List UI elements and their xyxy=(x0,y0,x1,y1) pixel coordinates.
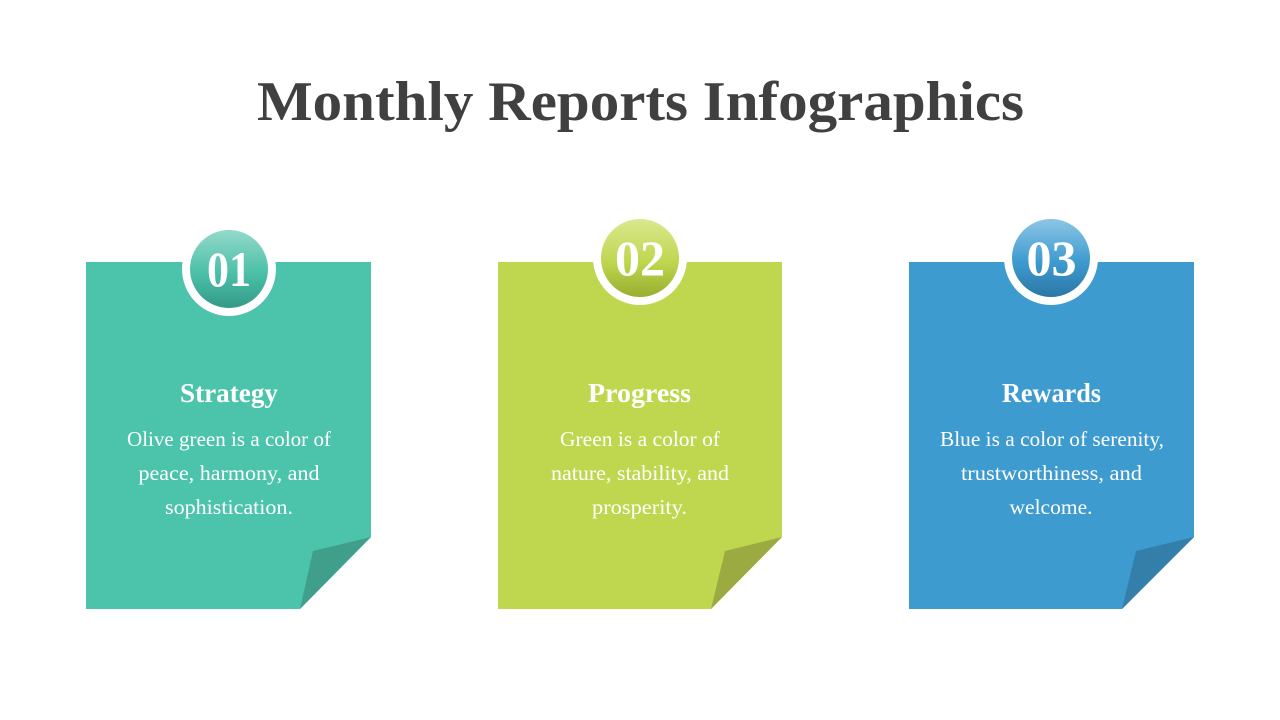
heading: progress: Progress xyxy=(588,378,691,408)
body text: rewards: welcome. xyxy=(1010,495,1092,519)
panel: progress xyxy=(498,211,782,609)
body text: strategy xyxy=(127,427,331,519)
badge: 03: 03 xyxy=(1026,230,1076,286)
folded corner: progress xyxy=(711,537,782,609)
heading: strategy: Strategy xyxy=(180,378,279,408)
badge: 02 xyxy=(593,211,687,305)
badge: 03 xyxy=(1004,211,1098,305)
folded corner: strategy xyxy=(300,537,371,609)
body text: progress: Green is a color of xyxy=(560,427,720,451)
panel: rewards xyxy=(909,211,1194,609)
body text: rewards: Blue is a color of serenity, xyxy=(940,427,1164,451)
panel: strategy xyxy=(86,222,371,609)
card: rewards sheet xyxy=(909,262,1194,609)
badge: 02: 02 xyxy=(615,230,665,286)
card: progress sheet xyxy=(498,262,782,609)
heading: rewards: Rewards xyxy=(1002,378,1101,408)
title: Monthly Reports Infographics xyxy=(257,71,1024,133)
badge: 01 xyxy=(182,222,276,316)
card: strategy sheet xyxy=(86,262,371,609)
folded corner: rewards xyxy=(1122,537,1194,609)
body text: strategy: Olive green is a color of xyxy=(127,427,331,451)
body text: rewards xyxy=(940,427,1164,519)
body text: progress: prosperity. xyxy=(592,495,687,519)
body text: rewards: trustworthiness, and xyxy=(961,461,1143,485)
body text: progress xyxy=(551,427,730,519)
body text: progress: nature, stability, and xyxy=(551,461,730,485)
body text: strategy: peace, harmony, and xyxy=(138,461,320,485)
body text: strategy: sophistication. xyxy=(165,495,293,519)
badge: 01: 01 xyxy=(207,241,251,297)
